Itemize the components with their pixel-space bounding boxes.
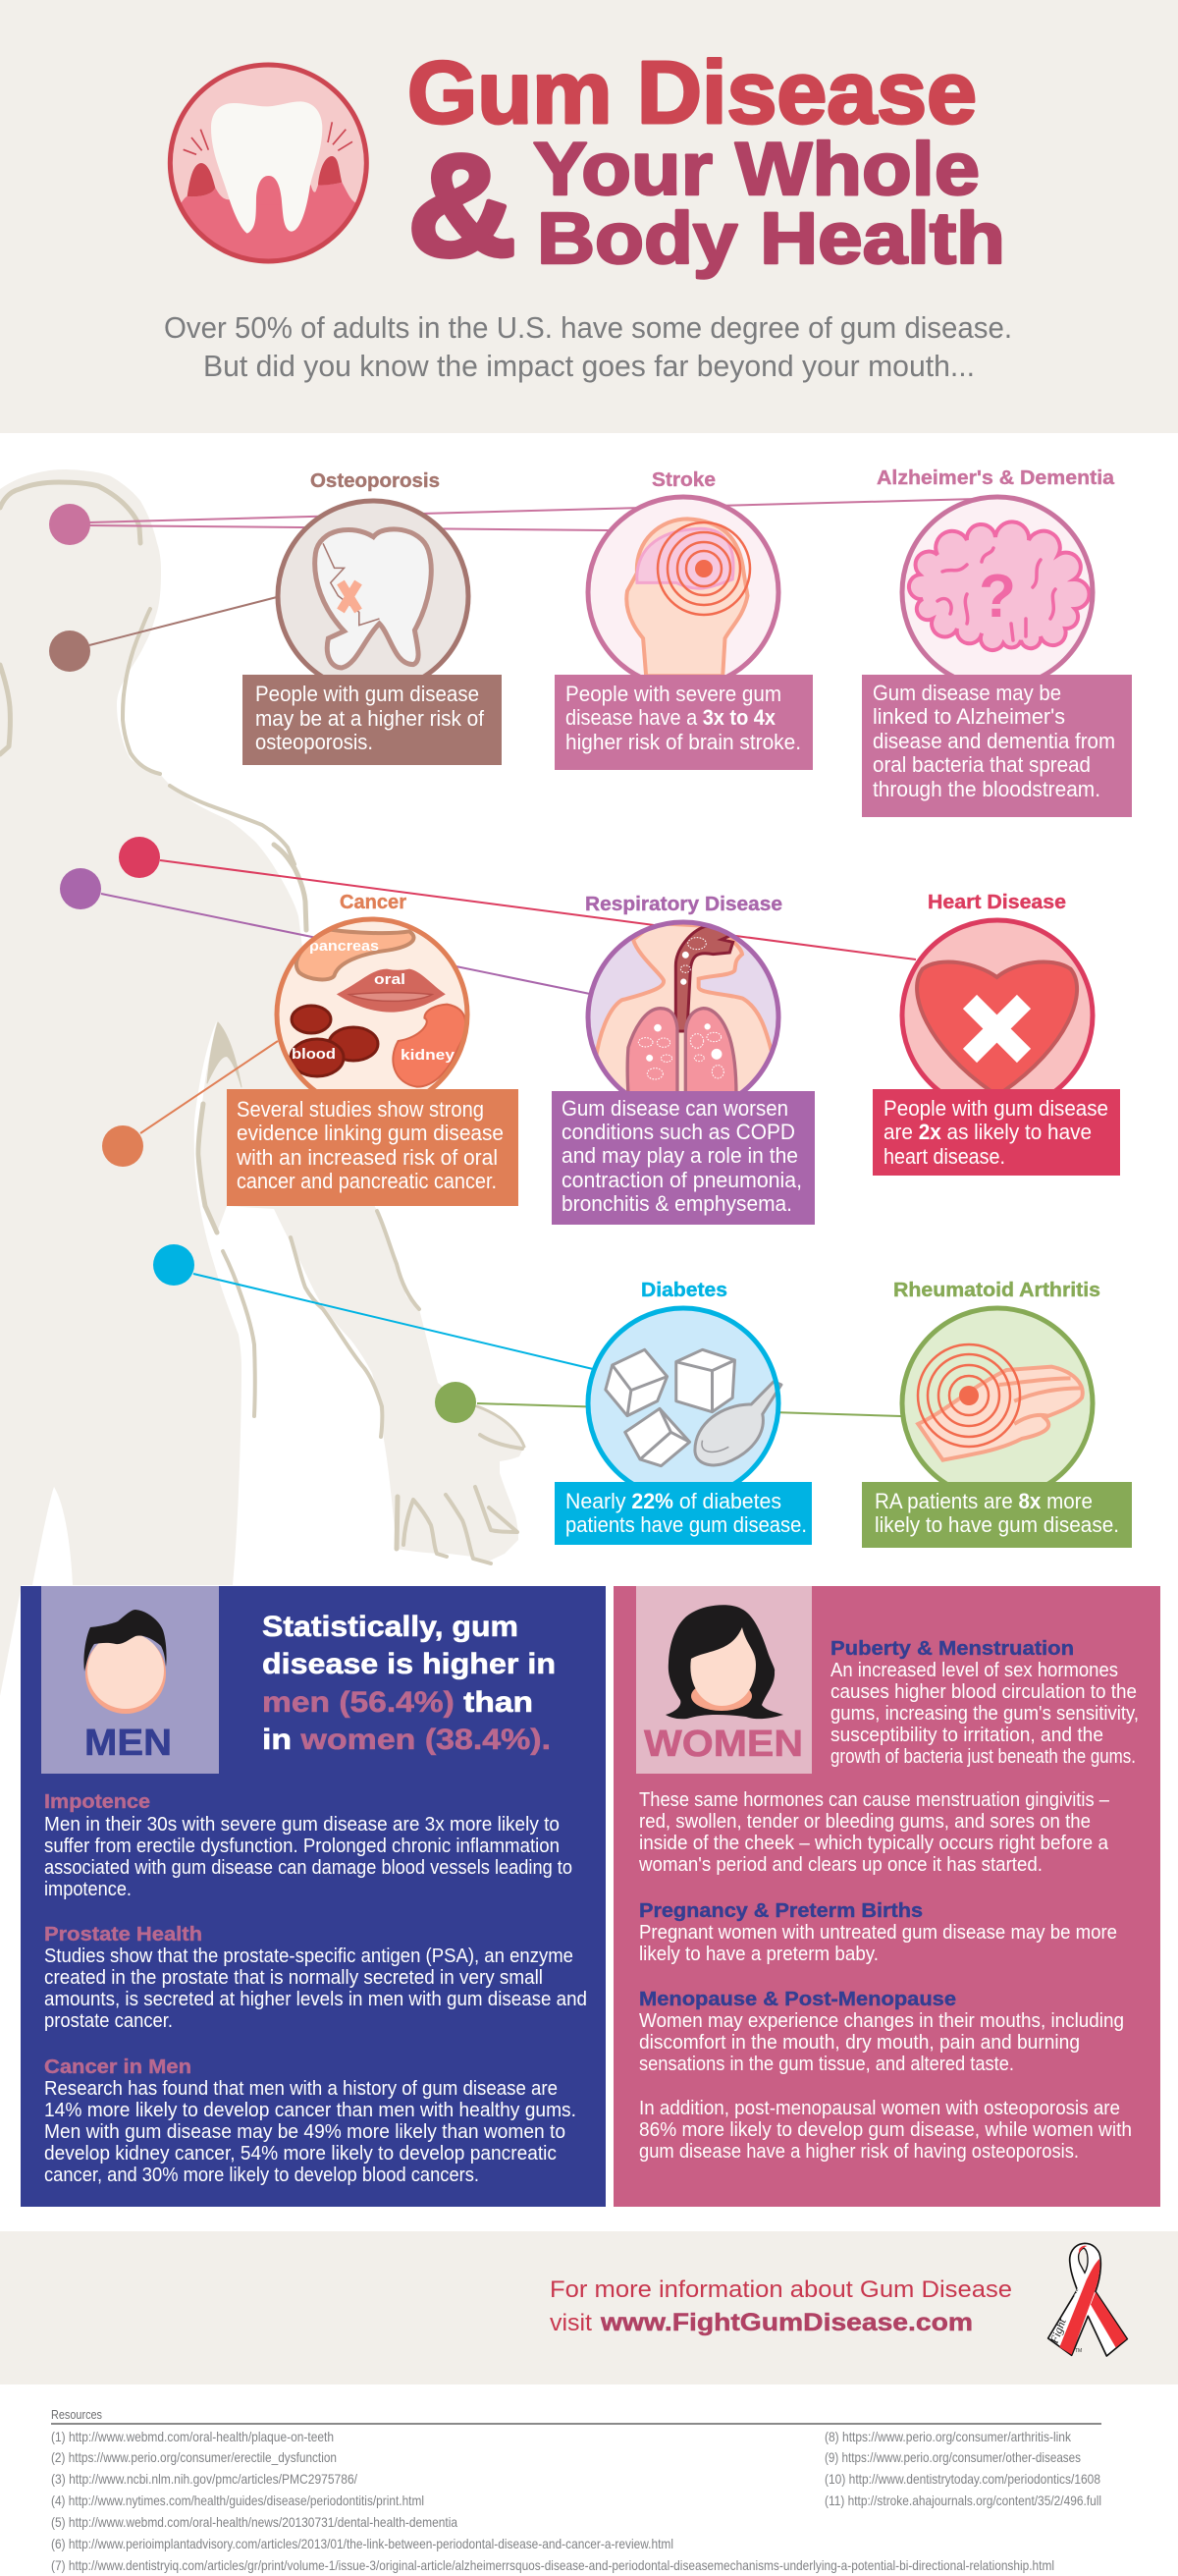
section: prostate health: Prostate Health bbox=[44, 1924, 202, 1946]
icon: awareness ribbon: TM bbox=[1075, 2348, 1082, 2354]
resources list: Resources bbox=[51, 2407, 102, 2422]
resources list: (4) http://www.nytimes.com/health/guides/disease/periodontitis/print.html bbox=[51, 2493, 424, 2508]
statistic headline: disease is higher in bbox=[262, 1648, 556, 1680]
section: puberty and menstruation: Puberty & Menstruation bbox=[830, 1638, 1074, 1660]
section: puberty and menstruation: gums, increasing the gum's sensitivity, bbox=[830, 1703, 1139, 1725]
section: prostate health: prostate cancer. bbox=[44, 2010, 173, 2032]
resources list: (8) https://www.perio.org/consumer/arthritis-link bbox=[825, 2429, 1072, 2444]
section: puberty and menstruation bbox=[830, 1638, 1139, 1768]
text block: menstruation gingivitis: These same hormones can cause menstruation gingivitis – bbox=[639, 1789, 1110, 1811]
text block: menstruation gingivitis bbox=[638, 1789, 1110, 1876]
panel: osteoporosis bbox=[242, 470, 502, 765]
men badge bbox=[41, 1586, 219, 1774]
section: impotence: impotence. bbox=[44, 1879, 132, 1900]
section: pregnancy: likely to have a preterm baby. bbox=[639, 1944, 879, 1965]
call to action text: For more information about Gum Disease bbox=[550, 2276, 1012, 2303]
title: Body Health bbox=[537, 197, 1005, 279]
text box: stroke: disease have a 3x to 4x bbox=[565, 705, 776, 730]
text box: cancer bbox=[227, 1089, 518, 1206]
statistic headline: men (56.4%) than bbox=[262, 1686, 533, 1719]
section: cancer in men: Research has found that men with a history of gum disease are bbox=[44, 2078, 558, 2100]
text box: respiratory bbox=[552, 1091, 815, 1225]
panel: alzheimer's and dementia bbox=[862, 467, 1132, 817]
subtitle: Over 50% of adults in the U.S. have some degree of gum disease. bbox=[164, 310, 1012, 345]
text box: alzheimer's: linked to Alzheimer's bbox=[873, 704, 1065, 729]
body silhouette bbox=[0, 469, 524, 1696]
resources list: (1) http://www.webmd.com/oral-health/plaque-on-teeth bbox=[51, 2429, 334, 2444]
section: impotence: Men in their 30s with severe gum disease are 3x more likely to bbox=[44, 1814, 560, 1836]
section: cancer in men: cancer, and 30% more likely to develop blood cancers. bbox=[44, 2165, 479, 2186]
text box: heart bbox=[873, 1089, 1120, 1176]
panel: rheumatoid arthritis bbox=[862, 1280, 1132, 1548]
text box: rheumatoid arthritis bbox=[862, 1482, 1132, 1548]
section: pregnancy: Pregnancy & Preterm Births bbox=[639, 1900, 923, 1922]
section: cancer in men: 14% more likely to develop cancer than men with healthy gums. bbox=[44, 2100, 576, 2121]
section: puberty and menstruation: causes higher blood circulation to the bbox=[830, 1681, 1137, 1703]
title: Your Whole bbox=[533, 128, 980, 211]
resources list: (5) http://www.webmd.com/oral-health/news/20130731/dental-health-dementia bbox=[51, 2514, 457, 2530]
icon: lungs and airway bbox=[588, 922, 778, 1113]
resources list: (2) https://www.perio.org/consumer/erectile_dysfunction bbox=[51, 2449, 337, 2465]
section: menopause: sensations in the gum tissue, and altered taste. bbox=[639, 2054, 1014, 2075]
text box: cancer: with an increased risk of oral bbox=[236, 1145, 498, 1170]
text box: respiratory: contraction of pneumonia, bbox=[562, 1168, 802, 1192]
section: menopause: Menopause & Post-Menopause bbox=[639, 1989, 956, 2010]
section: menopause: In addition, post-menopausal women with osteoporosis are bbox=[639, 2098, 1120, 2119]
resources list: (3) http://www.ncbi.nlm.nih.gov/pmc/articles/PMC2975786/ bbox=[51, 2471, 357, 2487]
section: pregnancy: Pregnant women with untreated gum disease may be more bbox=[639, 1922, 1117, 1944]
heading: rheumatoid arthritis: Rheumatoid Arthritis bbox=[893, 1280, 1100, 1301]
text box: stroke: People with severe gum bbox=[565, 682, 781, 706]
men badge: MEN bbox=[84, 1723, 172, 1764]
heading: respiratory: Respiratory Disease bbox=[585, 894, 782, 915]
icon: cracked tooth bbox=[278, 501, 468, 691]
call to action text bbox=[550, 2276, 1012, 2336]
section: prostate health: Studies show that the prostate-specific antigen (PSA), an enzyme bbox=[44, 1946, 573, 1967]
text box: stroke bbox=[555, 675, 813, 770]
heading: stroke: Stroke bbox=[652, 469, 716, 491]
women badge bbox=[636, 1586, 812, 1774]
resources list: (11) http://stroke.ahajournals.org/content/35/2/496.full bbox=[825, 2493, 1101, 2508]
statistic headline bbox=[262, 1611, 556, 1756]
icon: pancreas, lips, blood cells, kidney bbox=[277, 919, 467, 1110]
section: puberty and menstruation: susceptibility to irritation, and the bbox=[830, 1725, 1103, 1746]
icon: heart with cross bbox=[902, 920, 1093, 1111]
icon: awareness ribbon: Fight bbox=[1046, 2316, 1069, 2346]
text box: cancer: Several studies show strong bbox=[237, 1097, 484, 1122]
section: impotence: associated with gum disease can damage blood vessels leading to bbox=[44, 1857, 572, 1879]
text block: menstruation gingivitis: red, swollen, tender or bleeding gums, and sores on the bbox=[639, 1811, 1091, 1833]
resources list: (6) http://www.perioimplantadvisory.com/articles/2013/01/the-link-between-periodontal-disease-and-cancer-a-review.html bbox=[51, 2536, 673, 2551]
title: Gum Disease bbox=[407, 44, 977, 142]
section: menopause: 86% more likely to develop gum disease, while women with bbox=[639, 2119, 1132, 2141]
icon: awareness ribbon bbox=[1046, 2243, 1127, 2356]
text box: respiratory: and may play a role in the bbox=[562, 1143, 798, 1168]
footer call to action band bbox=[0, 2231, 1178, 2384]
text box: respiratory: bronchitis & emphysema. bbox=[562, 1191, 792, 1216]
panel: stroke bbox=[555, 469, 813, 770]
panel: respiratory disease bbox=[552, 894, 815, 1225]
icon: hand with target bbox=[902, 1308, 1093, 1499]
section: menopause: discomfort in the mouth, dry mouth, pain and burning bbox=[639, 2032, 1080, 2054]
text block: menstruation gingivitis: inside of the cheek – which typically occurs right before a bbox=[639, 1833, 1109, 1854]
section: impotence: suffer from erectile dysfunction. Prolonged chronic inflammation bbox=[44, 1836, 560, 1857]
icon: awareness ribbon: GUM DISEASE bbox=[1062, 2274, 1090, 2324]
text box: stroke: higher risk of brain stroke. bbox=[565, 730, 801, 754]
text box: alzheimer's: disease and dementia from bbox=[873, 729, 1115, 753]
icon: brain with question mark bbox=[902, 497, 1093, 687]
icon: head with brain target bbox=[588, 497, 778, 687]
section: cancer in men: develop kidney cancer, 54% more likely to develop pancreatic bbox=[44, 2143, 557, 2165]
text box: alzheimer's bbox=[862, 675, 1132, 817]
text box: osteoporosis: People with gum disease bbox=[255, 682, 479, 706]
icon: pancreas, lips, blood cells, kidney: oral bbox=[374, 971, 405, 988]
panel: women bbox=[614, 1586, 1160, 2207]
resources list: (9) https://www.perio.org/consumer/other-diseases bbox=[825, 2449, 1081, 2465]
text box: diabetes bbox=[555, 1482, 812, 1545]
text box: rheumatoid arthritis: RA patients are 8x more bbox=[875, 1489, 1093, 1513]
section: menopause bbox=[639, 1989, 1132, 2163]
icon: tooth with receding gums bbox=[164, 65, 373, 270]
icon: pancreas, lips, blood cells, kidney: kidney bbox=[401, 1047, 455, 1064]
section: puberty and menstruation: An increased level of sex hormones bbox=[830, 1660, 1118, 1681]
text box: alzheimer's: through the bloodstream. bbox=[873, 777, 1100, 801]
text block: menstruation gingivitis: woman's period and clears up once it has started. bbox=[638, 1854, 1043, 1876]
header panel bbox=[0, 0, 1178, 433]
resources list: (10) http://www.dentistrytoday.com/periodontics/1608 bbox=[825, 2471, 1100, 2487]
icon: pancreas, lips, blood cells, kidney: blood bbox=[292, 1046, 336, 1063]
section: prostate health bbox=[44, 1924, 587, 2032]
heading: cancer: Cancer bbox=[340, 892, 406, 913]
title: & bbox=[407, 125, 516, 287]
women badge: WOMEN bbox=[644, 1724, 803, 1765]
icon: brain with question mark: ? bbox=[979, 563, 1016, 630]
section: cancer in men: Cancer in Men bbox=[44, 2056, 191, 2078]
body marker dots bbox=[49, 504, 476, 1423]
section: pregnancy bbox=[639, 1900, 1117, 1965]
call to action text: www.FightGumDisease.com bbox=[600, 2309, 973, 2336]
statistic headline: Statistically, gum bbox=[262, 1611, 518, 1643]
text box: respiratory: Gum disease can worsen bbox=[562, 1096, 788, 1121]
text box: heart: People with gum disease bbox=[884, 1096, 1108, 1121]
text box: cancer: cancer and pancreatic cancer. bbox=[237, 1169, 497, 1193]
panel: men bbox=[21, 1586, 606, 2207]
text box: diabetes: Nearly 22% of diabetes bbox=[565, 1489, 781, 1513]
text box: osteoporosis: osteoporosis. bbox=[255, 730, 373, 754]
call to action text: visit bbox=[550, 2310, 592, 2336]
statistic headline: in women (38.4%). bbox=[262, 1724, 551, 1756]
subtitle: But did you know the impact goes far beyond your mouth... bbox=[203, 349, 975, 383]
connector lines bbox=[89, 499, 977, 1416]
resources list bbox=[51, 2407, 1101, 2573]
section: cancer in men bbox=[44, 2056, 576, 2186]
section: impotence bbox=[44, 1791, 572, 1900]
section: menopause: Women may experience changes in their mouths, including bbox=[639, 2010, 1124, 2032]
text box: osteoporosis: may be at a higher risk of bbox=[255, 706, 485, 731]
panel: cancer bbox=[227, 892, 518, 1206]
text box: heart: heart disease. bbox=[884, 1144, 1005, 1169]
text box: alzheimer's: oral bacteria that spread bbox=[873, 752, 1091, 777]
text box: osteoporosis bbox=[242, 675, 502, 765]
panel: heart disease bbox=[873, 892, 1120, 1176]
text box: heart: are 2x as likely to have bbox=[884, 1120, 1092, 1144]
icon: sugar cubes and spoon bbox=[588, 1308, 781, 1499]
section: prostate health: amounts, is secreted at higher levels in men with gum disease and bbox=[44, 1989, 587, 2010]
heading: alzheimer's: Alzheimer's & Dementia bbox=[877, 467, 1115, 489]
heading: osteoporosis: Osteoporosis bbox=[310, 470, 440, 492]
subtitle bbox=[164, 310, 1012, 383]
title bbox=[407, 44, 1005, 287]
text box: cancer: evidence linking gum disease bbox=[237, 1121, 504, 1145]
icon: pancreas, lips, blood cells, kidney: pancreas bbox=[309, 938, 379, 955]
heading: diabetes: Diabetes bbox=[641, 1280, 727, 1301]
text box: respiratory: conditions such as COPD bbox=[562, 1120, 795, 1144]
text box: diabetes: patients have gum disease. bbox=[565, 1512, 807, 1537]
text box: alzheimer's: Gum disease may be bbox=[873, 681, 1061, 705]
text box: rheumatoid arthritis: likely to have gum disease. bbox=[875, 1512, 1119, 1537]
section: menopause: gum disease have a higher risk of having osteoporosis. bbox=[639, 2141, 1079, 2163]
section: cancer in men: Men with gum disease may be 49% more likely than women to bbox=[44, 2121, 565, 2143]
panel: diabetes bbox=[555, 1280, 812, 1545]
heading: heart disease: Heart Disease bbox=[928, 892, 1066, 913]
section: prostate health: created in the prostate that is normally secreted in very small bbox=[44, 1967, 543, 1989]
section: impotence: Impotence bbox=[44, 1791, 150, 1813]
